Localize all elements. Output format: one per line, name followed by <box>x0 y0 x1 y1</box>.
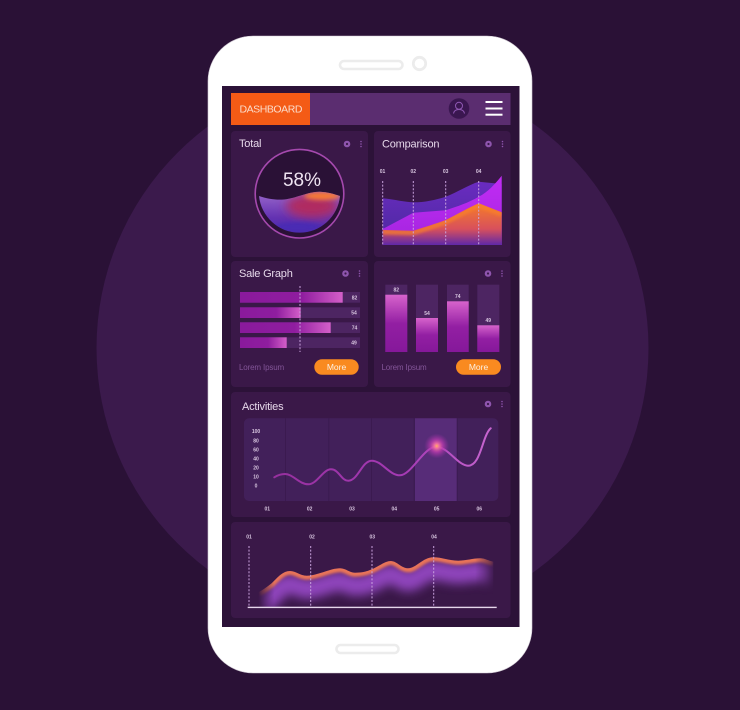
y axis labels <box>252 429 260 490</box>
phone body <box>208 36 532 673</box>
panel: activities <box>231 392 510 517</box>
icon: settings <box>486 141 503 147</box>
icon: user <box>449 98 469 119</box>
axis labels: 03 <box>443 169 449 175</box>
panel: sale graph <box>231 261 368 387</box>
speaker <box>340 61 402 69</box>
bar values: 82 <box>352 296 357 302</box>
dashboard label: DASHBOARD <box>240 104 303 116</box>
activity curve <box>274 428 491 484</box>
x axis labels: 03 <box>349 506 355 512</box>
column values: 74 <box>455 294 461 300</box>
header bar <box>231 93 510 125</box>
area chart <box>380 169 502 245</box>
wave area <box>258 558 493 605</box>
bar values: 49 <box>351 340 357 346</box>
panel: wave chart <box>231 522 510 618</box>
y axis labels: 80 <box>253 438 259 444</box>
camera <box>413 57 426 70</box>
guide lines <box>383 181 479 245</box>
axis labels <box>380 169 482 175</box>
bar values: 54 <box>351 310 357 316</box>
line chart <box>244 418 498 512</box>
column values: 54 <box>424 311 430 317</box>
gauge value: 58% <box>283 170 321 191</box>
y axis labels: 0 <box>255 484 258 490</box>
x axis labels: 01 <box>265 506 270 512</box>
y axis labels: 40 <box>253 456 259 462</box>
phone <box>208 36 532 673</box>
screen <box>222 86 520 627</box>
axis labels: 02 <box>411 169 416 175</box>
panel: total <box>231 131 368 257</box>
orange crest <box>383 205 502 233</box>
gauge liquid <box>259 192 340 233</box>
axis labels: 03 <box>370 534 375 540</box>
home button <box>336 645 398 653</box>
horizontal bars <box>240 286 360 352</box>
heading: activities: Activities <box>242 401 284 413</box>
y axis labels: 100 <box>252 429 260 435</box>
axis labels: 02 <box>309 534 315 540</box>
x axis labels <box>265 506 482 512</box>
icon: settings <box>343 270 360 277</box>
gauge ring <box>255 149 344 238</box>
heading: total: Total <box>239 138 261 150</box>
column values: 49 <box>486 318 491 324</box>
panel: vertical bars <box>374 261 510 387</box>
caption: Lorem Ipsum <box>382 363 427 372</box>
guide lines <box>249 546 434 606</box>
x axis labels: 05 <box>434 506 440 512</box>
icon: settings <box>486 401 503 407</box>
bar values <box>351 296 357 346</box>
x axis labels: 02 <box>307 506 313 512</box>
y axis labels: 10 <box>253 474 259 480</box>
axis labels: 04 <box>476 169 482 175</box>
icon: settings <box>345 141 362 147</box>
axis labels: 04 <box>431 534 437 540</box>
dashboard tab <box>231 93 310 125</box>
y axis labels: 20 <box>253 466 259 472</box>
baseline <box>248 607 497 608</box>
x axis labels: 06 <box>477 506 482 512</box>
heading: comparison: Comparison <box>382 138 439 150</box>
y axis labels: 60 <box>253 448 259 454</box>
button: more: More <box>327 362 346 372</box>
axis labels <box>246 534 437 540</box>
highlighted column <box>415 418 457 501</box>
guide line <box>299 286 301 352</box>
heading: sale graph: Sale Graph <box>239 268 293 280</box>
column values: 82 <box>394 288 399 294</box>
icon: settings <box>486 270 503 277</box>
icon: menu <box>486 101 502 116</box>
x axis labels: 04 <box>392 506 397 512</box>
axis labels: 01 <box>246 534 252 540</box>
column values <box>394 288 491 324</box>
button: more: More <box>469 362 488 372</box>
bar values: 74 <box>352 326 357 332</box>
caption: Lorem Ipsum <box>239 363 285 372</box>
panel: comparison <box>374 131 510 257</box>
column chart <box>385 285 499 352</box>
glow marker <box>424 434 449 458</box>
axis labels: 01 <box>380 169 385 175</box>
background circle <box>96 72 648 624</box>
